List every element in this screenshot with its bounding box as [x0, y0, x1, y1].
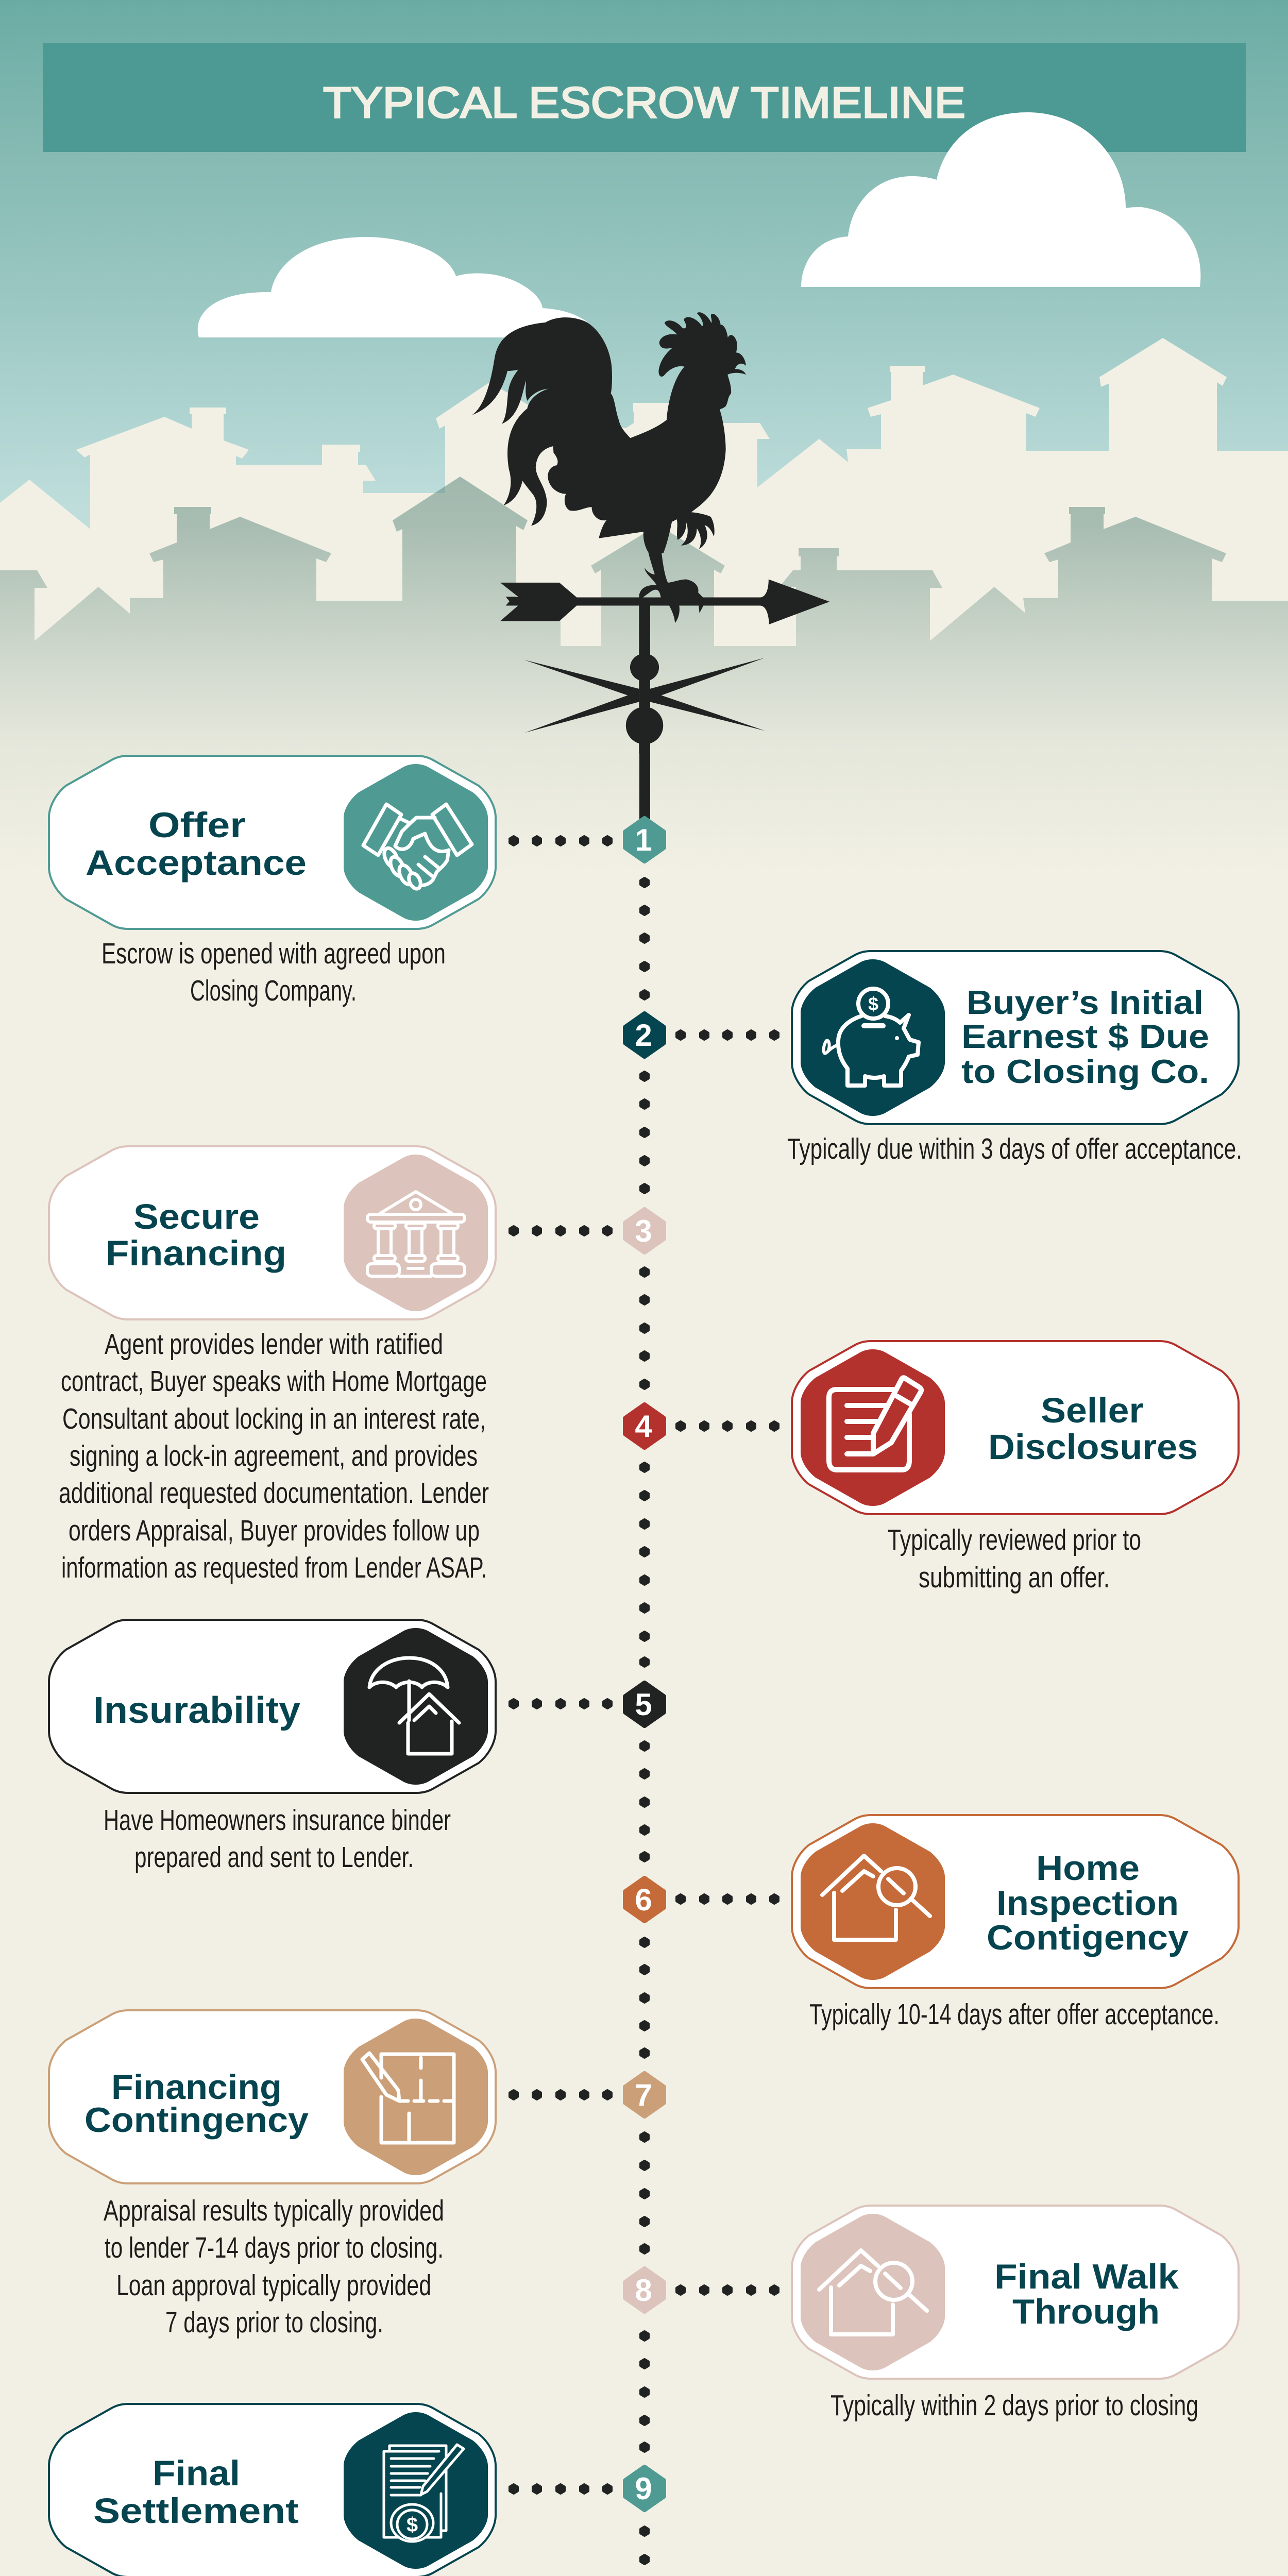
badge 1: 1	[635, 823, 652, 857]
title banner: TYPICAL ESCROW TIMELINE	[323, 78, 965, 127]
card 5	[49, 1620, 496, 1793]
heading 9	[93, 2453, 299, 2531]
badge 5: 5	[635, 1687, 652, 1722]
card 6	[792, 1815, 1239, 1988]
heading 4: Disclosures	[988, 1427, 1198, 1467]
heading 8: Through	[1012, 2292, 1160, 2331]
description 3: Consultant about locking in an interest rate,	[62, 1402, 486, 1435]
connector dots 2	[677, 1030, 778, 1040]
icon: bank	[344, 1155, 488, 1311]
badge 7	[625, 2074, 664, 2116]
heading 9: Settlement	[93, 2491, 299, 2531]
cloud: right	[801, 112, 1200, 287]
connector dots 5	[510, 1699, 611, 1708]
step 3: secure financing	[49, 1146, 664, 1584]
icon: umbrella over house	[344, 1628, 488, 1785]
heading 6: Home	[1036, 1849, 1140, 1888]
card 3	[49, 1146, 496, 1319]
heading 3: Financing	[106, 1233, 286, 1273]
description 1: Escrow is opened with agreed upon	[101, 937, 446, 970]
step 5: insurability	[49, 1620, 664, 1874]
icon: piggy bank: $	[868, 993, 878, 1014]
heading 2: to Closing Co.	[961, 1053, 1209, 1090]
icon: document, pen and coin: $	[406, 2514, 418, 2536]
description 1: Closing Company.	[190, 974, 357, 1007]
connector dots 9	[510, 2484, 611, 2494]
connector dots 3	[510, 1226, 611, 1235]
description 3	[59, 1328, 489, 1584]
badge 9: 9	[635, 2471, 652, 2506]
timeline vertical dots	[641, 878, 648, 2576]
description 5: prepared and sent to Lender.	[134, 1841, 414, 1874]
heading 3: Secure	[133, 1197, 260, 1236]
badge 7: 7	[635, 2078, 652, 2112]
connector dots 6	[677, 1895, 778, 1903]
badge 3	[625, 1210, 664, 1252]
badge 1	[625, 819, 664, 861]
weather vane rooster	[472, 312, 829, 753]
heading 6: Inspection	[996, 1884, 1179, 1923]
badge 8	[625, 2269, 664, 2311]
heading 2: Earnest $ Due	[961, 1018, 1209, 1055]
badge 3: 3	[635, 1214, 652, 1248]
heading 1	[86, 805, 307, 883]
description 7: Appraisal results typically provided	[104, 2194, 444, 2227]
card 7	[49, 2010, 496, 2183]
card 1	[49, 756, 496, 929]
badge 9	[625, 2467, 664, 2510]
description 7	[104, 2194, 444, 2339]
card 4	[792, 1341, 1239, 1514]
heading 1: Acceptance	[86, 843, 307, 883]
badge 6: 6	[635, 1883, 652, 1917]
badge 4	[625, 1405, 664, 1447]
badge 5	[625, 1683, 664, 1725]
sky gradient	[0, 0, 1288, 567]
step 9: final settlement	[49, 2404, 664, 2576]
heading 6: Contigency	[987, 1918, 1189, 1957]
badge 8: 8	[635, 2273, 652, 2308]
connector dots 8	[677, 2285, 778, 2295]
heading 8: Final Walk	[994, 2257, 1179, 2296]
step 1: offer acceptance	[49, 756, 664, 1007]
badge 2	[625, 1014, 664, 1056]
step 4: seller disclosures	[625, 1341, 1239, 1594]
icon: house with magnifier	[801, 1823, 945, 1980]
houses: back row	[0, 338, 1288, 876]
step 8: final walk through	[625, 2206, 1239, 2422]
icon: document, pen and coin	[344, 2412, 488, 2569]
description 4	[888, 1523, 1141, 1594]
description 5	[104, 1804, 451, 1874]
description 3: contract, Buyer speaks with Home Mortgage	[61, 1365, 487, 1398]
description 3: orders Appraisal, Buyer provides follow up	[69, 1514, 480, 1547]
description 7: 7 days prior to closing.	[165, 2306, 383, 2339]
heading 7: Contingency	[84, 2100, 309, 2140]
heading 2: Buyer’s Initial	[967, 984, 1204, 1021]
description 3: signing a lock-in agreement, and provides	[70, 1439, 478, 1472]
step 6: home inspection	[625, 1815, 1239, 2031]
heading 6	[987, 1849, 1189, 1957]
description 7: to lender 7-14 days prior to closing.	[105, 2231, 444, 2264]
icon: floor plan and pencil	[344, 2019, 488, 2175]
description 5: Have Homeowners insurance binder	[104, 1804, 451, 1837]
description 3: additional requested documentation. Lender	[59, 1477, 489, 1510]
badge 6	[625, 1878, 664, 1921]
description 3: Agent provides lender with ratified	[105, 1328, 443, 1361]
step 7: financing contingency	[49, 2010, 664, 2339]
heading 9: Final	[152, 2453, 240, 2493]
heading 7	[84, 2067, 309, 2140]
heading 5: Insurability	[93, 1690, 300, 1731]
heading 7: Financing	[111, 2067, 282, 2107]
houses: front row	[0, 477, 1288, 876]
cloud: left	[198, 237, 592, 337]
heading 2	[961, 984, 1209, 1090]
step 2: earnest money	[625, 951, 1242, 1165]
card 8	[792, 2206, 1239, 2379]
icon: house with magnifier	[801, 2214, 945, 2370]
heading 3	[106, 1197, 286, 1273]
description 7: Loan approval typically provided	[116, 2269, 431, 2302]
icon: document and pencil	[801, 1349, 945, 1506]
badge 4: 4	[635, 1409, 652, 1444]
card 2	[792, 951, 1239, 1124]
description 1	[101, 937, 446, 1007]
description 4: submitting an offer.	[919, 1561, 1110, 1594]
icon: piggy bank	[801, 959, 945, 1116]
icon: handshake	[344, 764, 488, 921]
connector dots 7	[510, 2091, 611, 2099]
description 4: Typically reviewed prior to	[888, 1523, 1141, 1556]
description 3: information as requested from Lender ASAP.	[61, 1551, 487, 1584]
badge 2: 2	[635, 1018, 652, 1053]
heading 8	[994, 2257, 1179, 2331]
heading 1: Offer	[148, 805, 246, 845]
card 9	[49, 2404, 496, 2576]
connector dots 1	[510, 837, 611, 845]
timeline pole	[639, 598, 650, 819]
title banner	[43, 43, 1246, 152]
heading 4: Seller	[1041, 1391, 1144, 1430]
connector dots 4	[677, 1422, 778, 1430]
heading 4	[988, 1391, 1198, 1467]
